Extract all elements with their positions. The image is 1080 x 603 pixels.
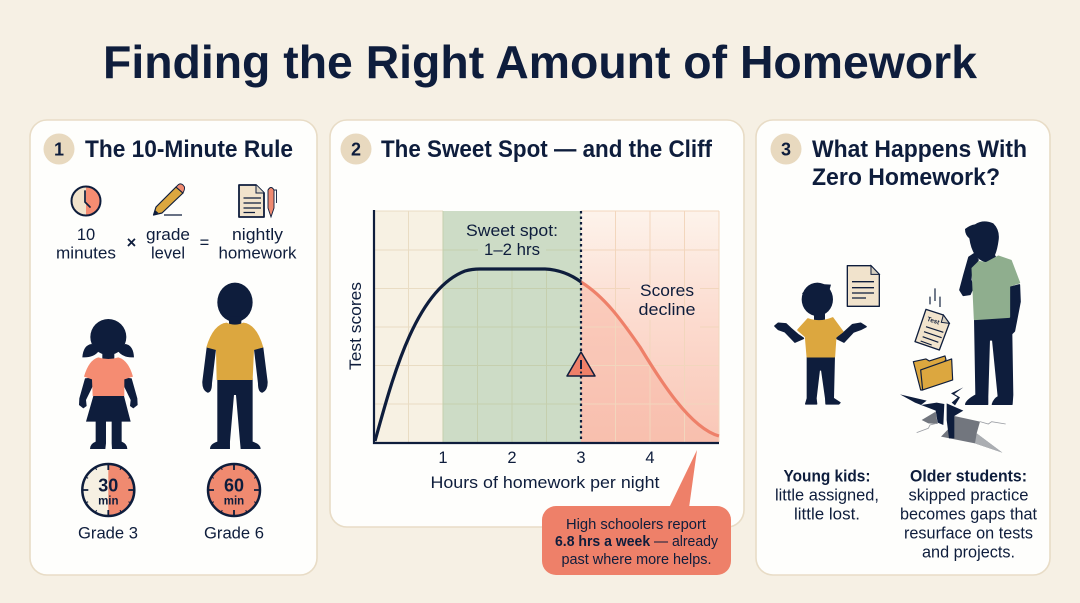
heading: the 10-minute rule: The 10-Minute Rule — [85, 136, 293, 163]
formula text: nightly — [232, 226, 284, 244]
callout: high schoolers report: 6.8 hrs a week — already — [555, 534, 719, 550]
title: Finding the Right Amount of Homework — [103, 36, 977, 88]
panel: the 10-minute rule — [30, 120, 317, 575]
heading: what happens with zero homework: What Happens With — [812, 136, 1027, 163]
timer: 30 min: 30 — [98, 476, 118, 496]
label: grade 3: Grade 3 — [78, 524, 138, 542]
icon: pencil — [154, 184, 185, 215]
caption: young kids: Young kids: — [784, 468, 870, 486]
badge 2: 2 — [351, 140, 361, 160]
formula text: = — [200, 234, 209, 252]
caption: young kids: little assigned, — [775, 486, 879, 504]
badge 3: 3 — [781, 140, 791, 160]
label: sweet spot: Sweet spot: — [466, 222, 558, 240]
panel: the sweet spot and the cliff — [330, 120, 744, 527]
formula text: level — [151, 244, 185, 262]
formula text: minutes — [56, 244, 116, 262]
y axis label: Test scores — [347, 282, 365, 370]
caption: older students: Older students: — [910, 468, 1027, 486]
icon: older student thinking — [960, 221, 1020, 404]
line chart: test scores against homework hours — [347, 210, 719, 492]
caption: older students: becomes gaps that — [900, 506, 1037, 524]
caption: older students: resurface on tests — [904, 524, 1033, 542]
icon: folder — [913, 356, 953, 390]
formula text: homework — [218, 244, 297, 262]
icon: falling test paper — [915, 288, 949, 350]
heading: what happens with zero homework: Zero Homework? — [812, 164, 1000, 191]
x axis ticks: 3 — [576, 449, 586, 467]
label: scores decline — [638, 282, 696, 319]
icon: homework page and pen — [239, 185, 276, 217]
formula text: 10 — [77, 226, 95, 244]
formula text: grade — [146, 226, 190, 244]
label: sweet spot — [466, 222, 558, 259]
icon: clock — [72, 186, 100, 216]
icon: assignment page — [847, 266, 879, 306]
caption: young kids: little lost. — [794, 506, 860, 524]
caption: older students: skipped practice — [908, 486, 1028, 504]
timer: 30 min: min — [98, 496, 119, 508]
x axis ticks — [438, 449, 655, 467]
heading: the sweet spot and the cliff: The Sweet Spot — and the Cliff — [381, 136, 713, 163]
formula text: × — [127, 234, 136, 252]
timer: 60 min — [208, 464, 260, 516]
x axis ticks: 1 — [438, 449, 448, 467]
timer: 60 min: min — [224, 496, 244, 508]
badge 2 — [340, 134, 372, 164]
callout: high schoolers report: High schoolers report — [566, 517, 706, 533]
callout: high schoolers report — [542, 450, 731, 575]
badge 1 — [44, 134, 74, 164]
label: sweet spot: 1–2 hrs — [484, 241, 540, 259]
icon: warning triangle — [567, 352, 595, 376]
icon: boy, grade 6 — [202, 283, 268, 449]
x axis label: Hours of homework per night — [430, 474, 660, 492]
caption: older students: and projects. — [922, 544, 1015, 562]
x axis ticks: 4 — [645, 449, 655, 467]
caption: young kids — [775, 468, 879, 524]
caption: older students — [900, 468, 1037, 562]
x axis ticks: 2 — [507, 449, 517, 467]
badge 3 — [770, 134, 802, 164]
label: scores decline: Scores — [640, 282, 694, 300]
label: grade 6: Grade 6 — [204, 524, 264, 542]
callout: high schoolers report: past where more helps. — [562, 552, 712, 568]
icon: cracked ground — [900, 387, 1006, 453]
formula text — [56, 226, 297, 262]
icon: girl, grade 3 — [79, 319, 138, 449]
label: scores decline: decline — [638, 301, 696, 319]
icon: falling test paper: Test — [926, 316, 941, 327]
icon: young child shrugging — [775, 283, 866, 404]
timer: 60 min: 60 — [224, 476, 244, 496]
panel: what happens with zero homework — [756, 120, 1050, 575]
heading: what happens with zero homework — [812, 136, 1027, 191]
badge 1: 1 — [54, 140, 64, 160]
timer: 30 min — [82, 464, 134, 516]
